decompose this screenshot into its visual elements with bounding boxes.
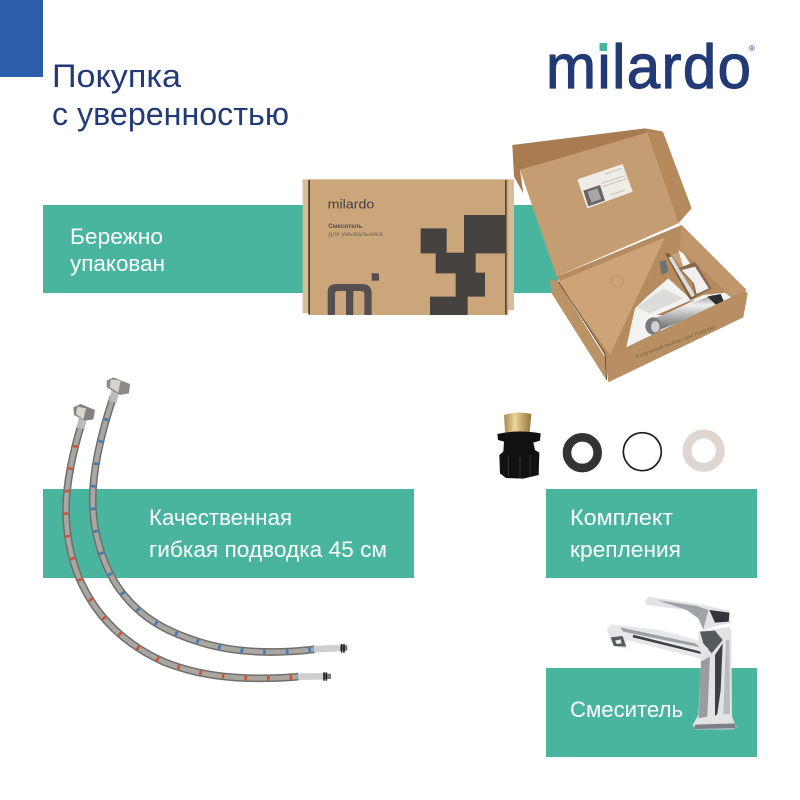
box walls (550, 279, 748, 382)
icon: pale washer (687, 434, 720, 467)
icon: o-ring (623, 433, 661, 471)
hose: cold water (blue) (93, 377, 347, 653)
banner: mounting kit: Комплект (570, 505, 673, 530)
title (52, 58, 289, 132)
mounting kit parts (497, 413, 720, 479)
label card (577, 164, 633, 208)
box monogram (328, 284, 372, 315)
faucet handle (644, 597, 731, 631)
flexible hoses (66, 377, 347, 681)
title: Покупка (52, 58, 181, 94)
brand logo: milardo (546, 32, 751, 101)
banner: faucet (546, 668, 757, 757)
hose: hot water (red) (66, 404, 331, 681)
banner: carefully packed: упакован (70, 251, 165, 276)
banner: flexible hose (43, 489, 414, 578)
corner accent block (0, 0, 43, 77)
closed cardboard box (303, 179, 514, 315)
box logo: milardo (328, 197, 374, 212)
brand logo: ® (749, 44, 755, 53)
packed faucet parts (672, 252, 694, 278)
tissue paper (626, 278, 734, 348)
banner: carefully packed (43, 205, 558, 293)
chrome faucet (607, 597, 737, 729)
open cardboard box (512, 128, 748, 382)
title: с уверенностью (52, 96, 289, 132)
faucet spout (607, 624, 708, 659)
icon: black washer (567, 437, 598, 468)
icon: threaded adapter (497, 413, 541, 479)
box pattern (421, 215, 505, 315)
box interior (557, 225, 747, 358)
banner: flexible hose: гибкая подводка 45 см (149, 537, 387, 562)
banner: carefully packed: Бережно (70, 224, 163, 249)
banner: mounting kit (546, 489, 757, 578)
faucet body (693, 627, 737, 729)
banner: flexible hose: Качественная (149, 505, 292, 530)
closed cardboard box: для умывальника (328, 232, 383, 238)
box walls: Разумный выбор при покупке (635, 323, 717, 360)
box lid (512, 128, 692, 277)
triangular insert (558, 237, 665, 355)
banner: mounting kit: крепления (570, 537, 681, 562)
box label: Смеситель (328, 224, 363, 230)
banner: faucet: Смеситель (570, 697, 683, 722)
